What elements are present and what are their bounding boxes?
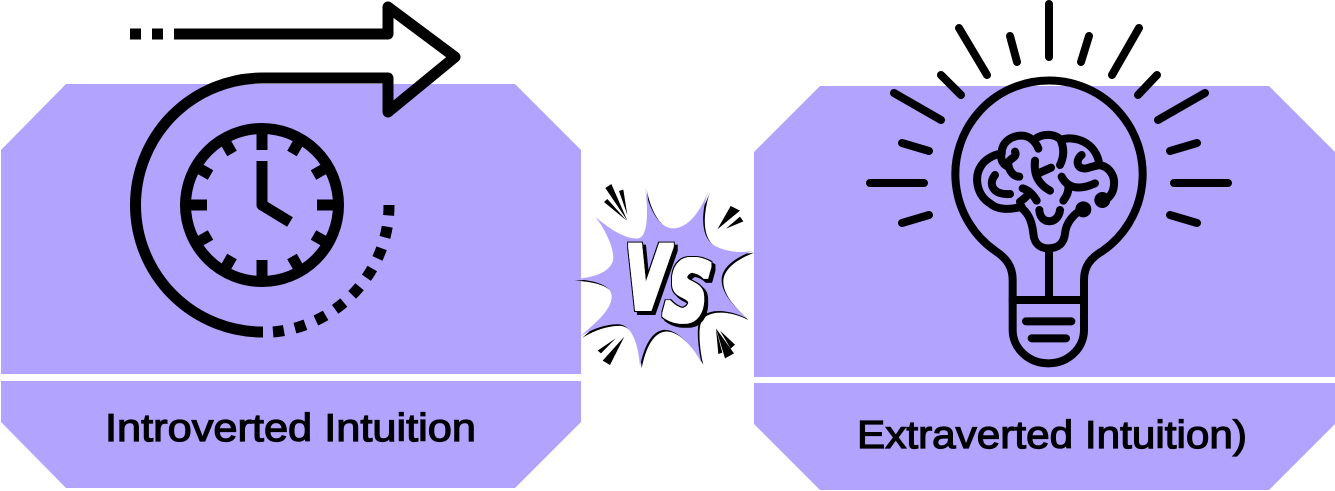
panel: extraverted intuition <box>754 86 1335 490</box>
vs lettering <box>626 228 715 345</box>
burst shape <box>573 187 754 368</box>
dotted arc <box>273 205 389 332</box>
rays <box>870 4 1228 223</box>
clock <box>186 128 338 282</box>
icon: arrow circling around a clock <box>130 7 455 332</box>
arrow with dashed tail <box>130 7 455 332</box>
icon: light bulb with brain <box>870 4 1228 363</box>
burst accent lines <box>598 184 743 365</box>
label: extraverted intuition: Extraverted Intuition) <box>857 414 1247 457</box>
panel: introverted intuition <box>1 84 581 488</box>
bulb and brain <box>955 80 1143 363</box>
label: introverted intuition: Introverted Intuition <box>105 407 476 450</box>
vs lettering: V <box>626 228 672 331</box>
vs lettering: S <box>660 242 715 345</box>
vs comic burst <box>573 184 754 368</box>
